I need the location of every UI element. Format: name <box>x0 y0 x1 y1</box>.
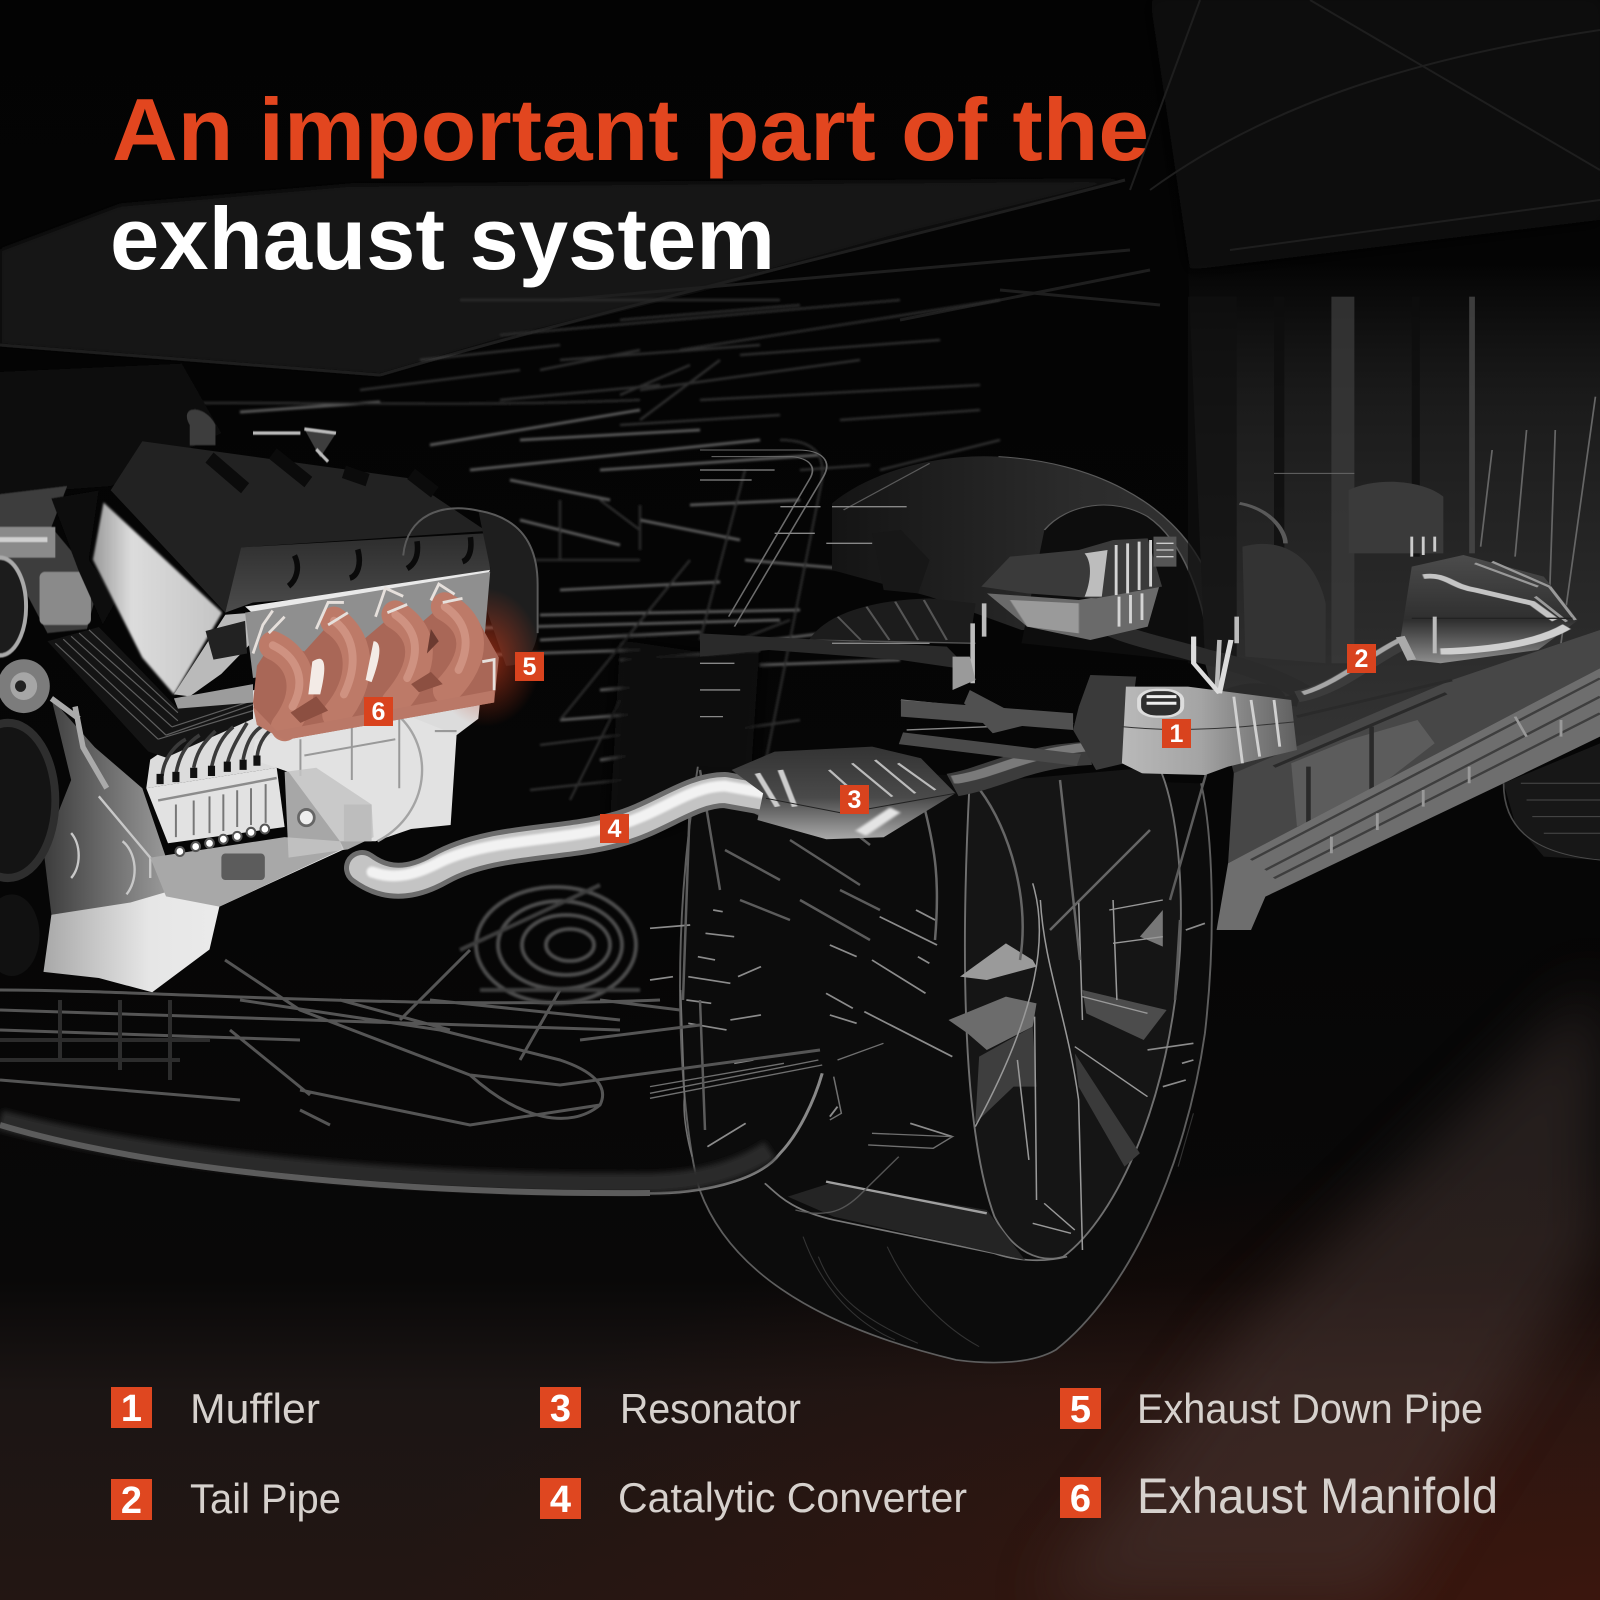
fog lamp <box>460 885 640 1003</box>
legend item 2: Tail Pipe: 2 <box>121 1480 142 1522</box>
part marker 5: 5 <box>523 653 537 681</box>
legend item 4: Catalytic Converter: Catalytic Converter <box>618 1474 967 1521</box>
car body: hood and roof <box>0 0 1600 375</box>
engine: dark ribbon belt <box>47 627 253 758</box>
engine: lower gray casting <box>43 698 170 915</box>
legend item 1: Muffler: 1 <box>121 1388 142 1430</box>
front wheel <box>650 767 1212 1363</box>
part marker 2: 2 <box>1355 645 1368 673</box>
upper tire tread <box>683 760 1210 1130</box>
legend <box>111 1385 1498 1524</box>
part marker 3: 3 <box>848 786 861 814</box>
legend item 3: Resonator: 3 <box>550 1388 571 1430</box>
engine: pulleys <box>0 659 150 976</box>
engine: injection pump <box>146 723 374 880</box>
tail pipe and tail muffler <box>1297 537 1578 697</box>
engine: exhaust manifold <box>253 584 499 740</box>
legend item 1: Muffler <box>111 1385 320 1432</box>
engine: white side panel <box>93 502 222 694</box>
legend item 2: Tail Pipe: Tail Pipe <box>190 1475 341 1522</box>
side sill <box>1217 668 1600 930</box>
front bumper and grille <box>0 950 820 1193</box>
rear upper muffler <box>901 537 1308 733</box>
legend item 4: Catalytic Converter: 4 <box>550 1479 571 1521</box>
part marker 6: 6 <box>372 698 385 726</box>
part marker 2 <box>1347 644 1376 673</box>
legend item 3: Resonator <box>540 1385 801 1432</box>
engine: white lower block <box>43 841 344 992</box>
part marker 6 <box>364 697 393 726</box>
title <box>110 80 1149 288</box>
part marker 4 <box>600 814 629 843</box>
down pipe / catalytic converter pipe <box>362 786 770 881</box>
main muffler <box>1073 637 1300 775</box>
engine <box>0 364 542 992</box>
part marker 4: 4 <box>608 815 622 843</box>
engine: light strip under cover <box>174 613 253 696</box>
legend item 1: Muffler: Muffler <box>190 1385 320 1432</box>
engine: mid casting <box>150 837 342 907</box>
engine: manifold glow <box>431 588 542 727</box>
part marker 3 <box>840 785 869 814</box>
legend item 6: Exhaust Manifold: 6 <box>1070 1478 1091 1520</box>
engine: valve cover <box>111 441 538 666</box>
engine: ports behind manifold <box>245 572 490 678</box>
engine: top-left machinery <box>0 364 336 656</box>
resonator and connecting pipes <box>732 738 1090 839</box>
legend item 5: Exhaust Down Pipe: 5 <box>1070 1389 1091 1431</box>
title line 2: exhaust system <box>110 189 775 288</box>
engine: white backfill <box>146 641 486 788</box>
part marker 5 <box>515 652 544 681</box>
title line 1: An important part of the <box>112 80 1149 179</box>
wheel arch and spare tire <box>700 450 1234 730</box>
engine bay wireframe <box>0 300 1000 830</box>
legend item 5: Exhaust Down Pipe: Exhaust Down Pipe <box>1137 1385 1483 1432</box>
legend item 6: Exhaust Manifold: Exhaust Manifold <box>1137 1468 1498 1524</box>
part marker 1 <box>1162 719 1191 748</box>
part marker 1: 1 <box>1170 720 1184 748</box>
engine: upper white housing <box>253 711 457 841</box>
legend item 2: Tail Pipe <box>111 1475 341 1522</box>
legend item 3: Resonator: Resonator <box>620 1385 801 1432</box>
interior and chassis floor <box>1188 263 1600 863</box>
